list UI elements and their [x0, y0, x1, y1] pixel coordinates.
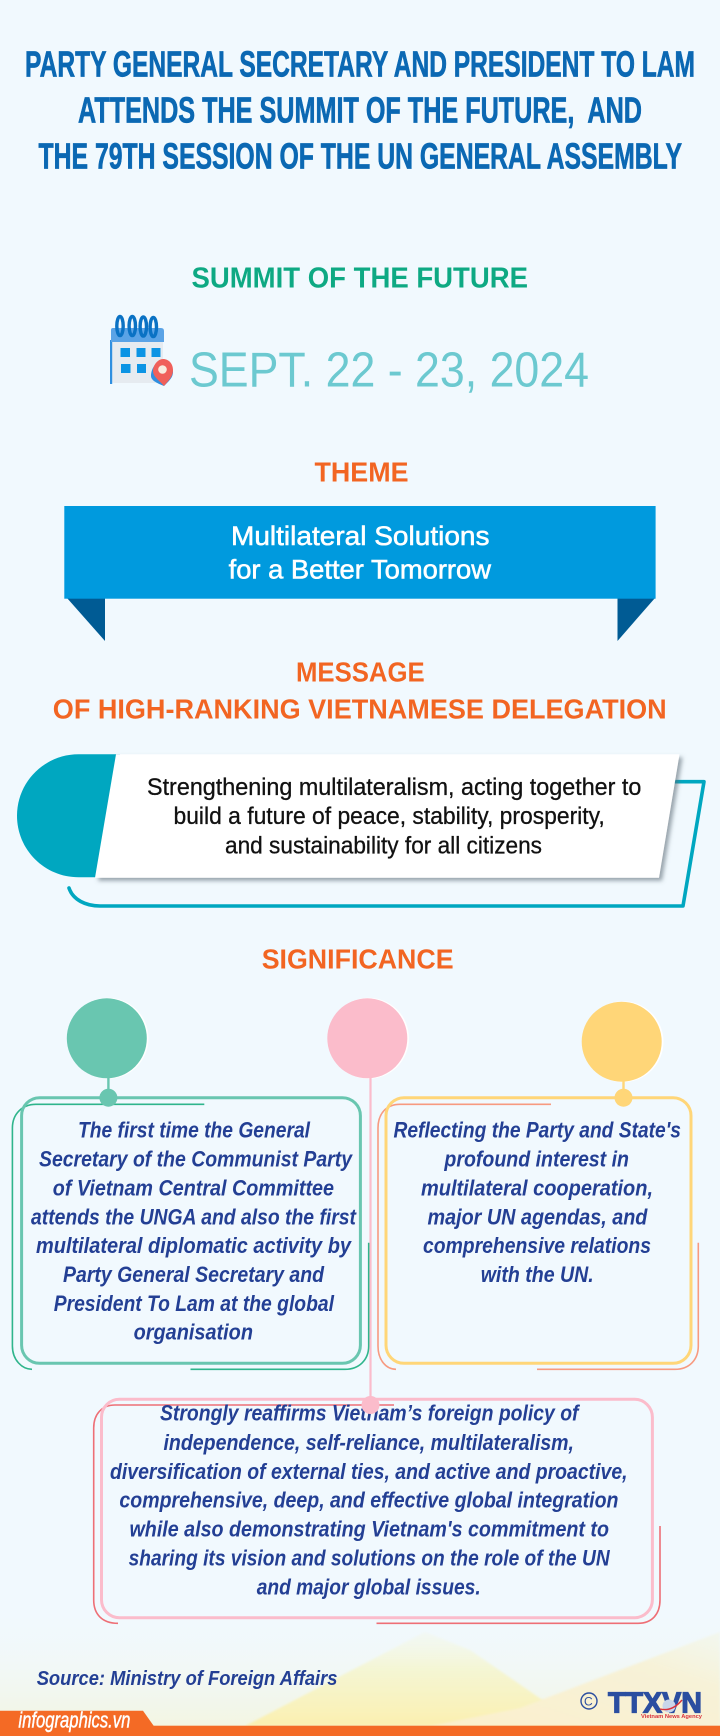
card text: profound interest in	[444, 1147, 629, 1172]
card text: attends the UNGA and also the first	[31, 1204, 357, 1229]
logo: TTXVN Vietnam News Agency: TTXVN	[608, 1688, 702, 1720]
card text: Reflecting the Party and State's	[394, 1118, 681, 1143]
card text	[394, 1118, 681, 1287]
banner body	[64, 506, 656, 599]
panel: message	[17, 754, 704, 906]
logo: TTXVN Vietnam News Agency: C	[584, 1694, 593, 1708]
panel: foreign policy card (pink)	[94, 998, 660, 1623]
balloon circle with long stem	[327, 998, 409, 1414]
card text: major UN agendas, and	[428, 1204, 648, 1229]
date: SEPT. 22 - 23, 2024	[189, 344, 589, 398]
card text: while also demonstrating Vietnam's commitment to	[130, 1517, 609, 1542]
card text: and major global issues.	[257, 1574, 481, 1599]
thin outer bracket	[94, 1405, 660, 1623]
source: Source: Ministry of Foreign Affairs	[37, 1668, 337, 1690]
banner text: Multilateral Solutions	[231, 521, 490, 551]
message text: and sustainability for all citizens	[225, 832, 542, 859]
teal half-round tab	[17, 754, 120, 877]
heading: significance: SIGNIFICANCE	[262, 943, 454, 974]
balloon circle	[582, 1001, 664, 1107]
teal outline frame	[69, 782, 704, 906]
footer site name: infographics.vn	[18, 1708, 130, 1733]
heading: message of high-ranking Vietnamese delegation: MESSAGE	[296, 657, 425, 688]
card text: multilateral cooperation,	[421, 1176, 653, 1200]
card text: Party General Secretary and	[63, 1262, 324, 1287]
card text: The first time the General	[78, 1118, 311, 1143]
card text: Strongly reaffirms Vietnam’s foreign policy of	[160, 1401, 581, 1426]
card text: Secretary of the Communist Party	[39, 1147, 354, 1172]
message text	[147, 774, 641, 859]
card text: of Vietnam Central Committee	[53, 1176, 334, 1200]
heading: theme: THEME	[314, 457, 408, 488]
card text: comprehensive, deep, and effective global integration	[119, 1488, 619, 1513]
card text: with the UN.	[481, 1262, 594, 1287]
card text	[31, 1118, 357, 1345]
card text: independence, self-reliance, multilateralism,	[164, 1430, 574, 1455]
thin outer bracket	[378, 1104, 698, 1369]
card text	[110, 1401, 628, 1599]
footer bar	[0, 1708, 720, 1736]
card text: comprehensive relations	[423, 1233, 651, 1258]
icon: calendar with location pin	[110, 316, 173, 386]
heading: message of high-ranking Vietnamese delegation	[53, 657, 667, 724]
card text: sharing its vision and solutions on the role of the UN	[129, 1546, 611, 1571]
rounded frame	[102, 1399, 652, 1618]
message text: Strengthening multilateralism, acting together to	[147, 774, 641, 801]
panel: party and state interest card (yellow)	[378, 1001, 698, 1369]
banner text	[229, 521, 491, 584]
message text: build a future of peace, stability, prosperity,	[174, 803, 605, 830]
card text: diversification of external ties, and active and proactive,	[110, 1459, 628, 1484]
heading: summit of the future: SUMMIT OF THE FUTURE	[192, 262, 528, 294]
title	[25, 44, 695, 176]
balloon circle	[67, 998, 148, 1107]
banner text: for a Better Tomorrow	[229, 554, 491, 584]
card text: President To Lam at the global	[54, 1291, 335, 1316]
rounded frame	[386, 1098, 691, 1363]
panel: first-time card (green)	[12, 998, 369, 1369]
heading: message of high-ranking Vietnamese delegation: OF HIGH-RANKING VIETNAMESE DELEGATION	[53, 693, 667, 724]
thin outer bracket	[12, 1104, 369, 1369]
white message card	[95, 754, 680, 878]
card text: multilateral diplomatic activity by	[36, 1233, 353, 1258]
banner fold: right	[618, 598, 655, 641]
banner fold: left	[67, 598, 105, 641]
logo: TTXVN Vietnam News Agency: Vietnam News Agency	[641, 1714, 703, 1720]
card text: organisation	[134, 1320, 253, 1345]
theme banner	[64, 506, 656, 641]
rounded frame	[22, 1098, 360, 1363]
